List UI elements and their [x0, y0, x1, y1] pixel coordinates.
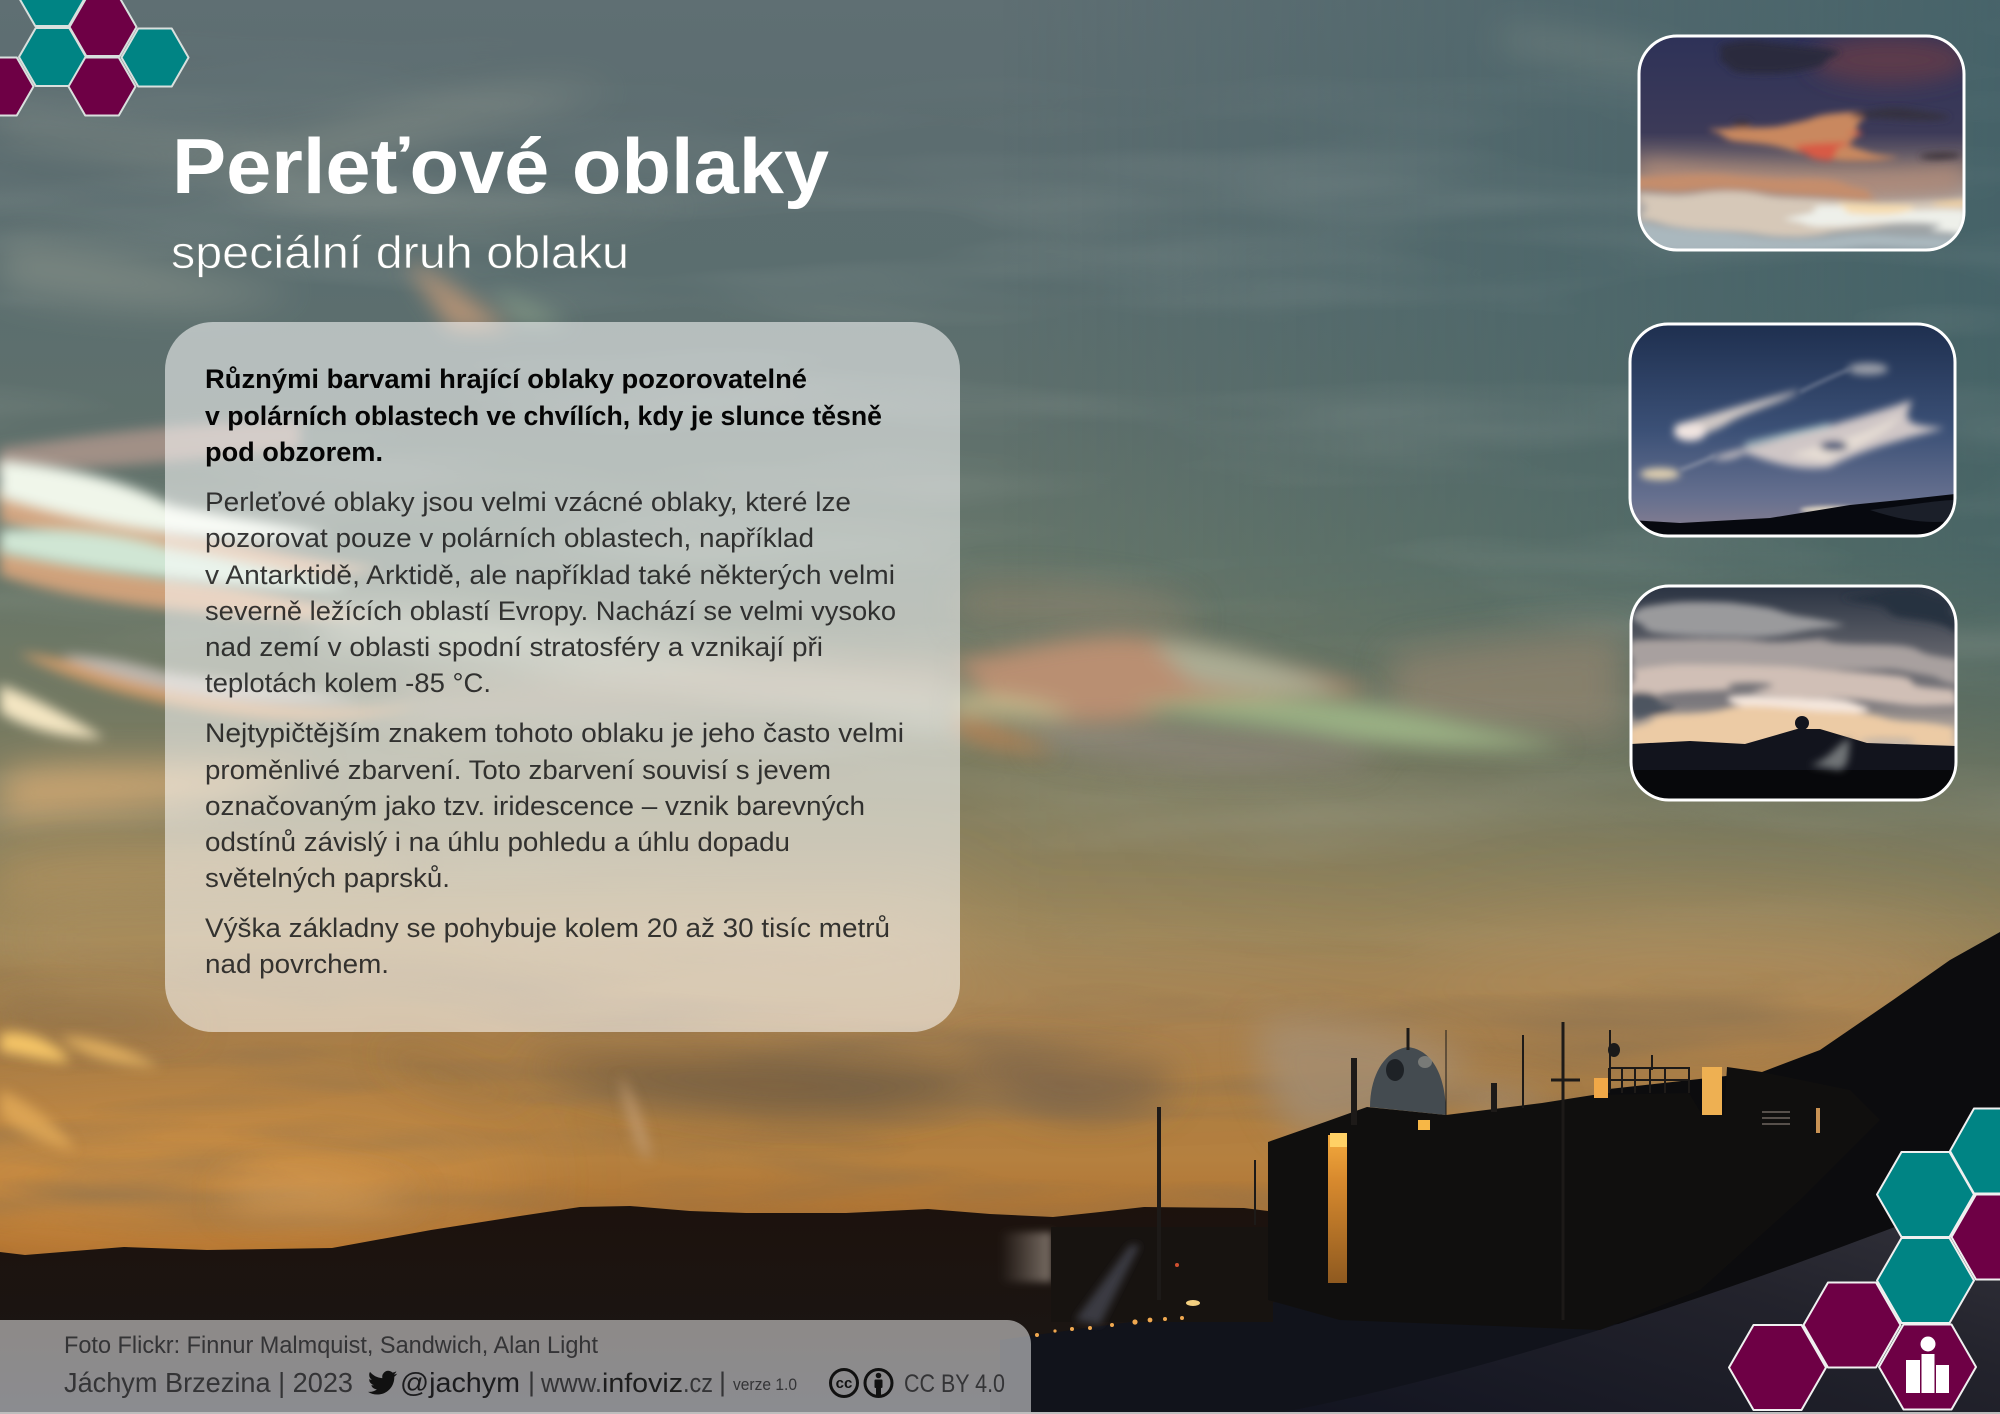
hexagon teal: [18, 0, 86, 26]
paragraph: colouring: Nejtypičtějším znakem tohoto oblaku je jeho často velmi: [205, 718, 904, 748]
hexagon magenta: [68, 58, 136, 116]
dusk cloud texture: [0, 993, 1836, 1233]
lead paragraph: Různými barvami hrající oblaky pozorovatelné: [205, 364, 807, 394]
warm dusk clouds: [0, 900, 1980, 1250]
paragraph: colouring: označovaným jako tzv. iridescence – vznik barevných: [205, 791, 865, 821]
right hill silhouette: [1600, 932, 2000, 1414]
lead paragraph: [205, 364, 882, 467]
paragraph: colouring: světelných paprsků.: [205, 863, 450, 893]
paragraph: occurrence: severně ležících oblastí Evropy. Nachází se velmi vysoko: [205, 596, 896, 626]
hexagon teal: [1877, 1152, 1974, 1237]
icon: creative commons: [830, 1370, 858, 1396]
station steam: [1257, 1017, 1560, 1140]
mountain ridge silhouette: [0, 1206, 1300, 1414]
lit walls: [1328, 1135, 1347, 1283]
paragraph: occurrence: v Antarktidě, Arktidě, ale například také některých velmi: [205, 560, 895, 590]
paragraph: occurrence: [205, 487, 896, 698]
panel background: [165, 322, 960, 1032]
snow slope: [1274, 1190, 2000, 1414]
lower ground: [1000, 1200, 2000, 1414]
website: [528, 1367, 726, 1398]
footer background: [0, 1320, 1031, 1412]
paragraph: height: nad povrchem.: [205, 949, 389, 979]
iridescent cloud left edge: [0, 420, 380, 619]
twitter handle: @jachym: [400, 1367, 520, 1398]
hexagon magenta with logo: [1879, 1324, 1976, 1410]
main station building: [1159, 1022, 1880, 1330]
fog by lower-left building: [1000, 1232, 1052, 1282]
rainbow wisp above the panel: [405, 262, 570, 330]
base edge: [0, 1412, 2000, 1414]
frame: [1639, 36, 1964, 250]
panel: description: [165, 322, 960, 1032]
frame: [1630, 324, 1955, 536]
photo: nacreous clouds over dome: [1631, 586, 1956, 800]
website: .cz: [683, 1368, 713, 1398]
lead paragraph: v polárních oblastech ve chvílích, kdy je slunce těsně: [205, 401, 882, 431]
hexagon magenta left: [1729, 1325, 1826, 1410]
hexagon magenta: [1804, 1282, 1900, 1368]
website: www.: [540, 1368, 602, 1398]
paragraph: occurrence: teplotách kolem -85 °C.: [205, 668, 491, 698]
icon: attribution: [865, 1370, 892, 1396]
hexagon magenta: [70, 0, 136, 56]
hexagon magenta: [1952, 1194, 2000, 1280]
photo: colourful cloud bands: [1639, 36, 1970, 250]
paragraph: occurrence: nad zemí v oblasti spodní stratosféry a vznikají při: [205, 632, 823, 662]
website: |: [528, 1367, 535, 1397]
louvre: [1762, 1112, 1790, 1124]
hexagon cluster top left: [0, 0, 188, 116]
dish: [1608, 1043, 1620, 1057]
lead paragraph: pod obzorem.: [205, 437, 383, 467]
hexagon cluster bottom right: [1729, 1108, 2000, 1410]
masts and antennas: [1159, 1022, 1689, 1320]
icon: twitter bird: [368, 1371, 397, 1395]
paragraph: colouring: odstínů závislý i na úhlu pohledu a úhlu dopadu: [205, 827, 790, 857]
iridescent band behind panel: [0, 607, 960, 900]
paragraph: occurrence: Perleťové oblaky jsou velmi vzácné oblaky, které lze: [205, 487, 851, 517]
photo: iridescent clouds over dark ridge: [1630, 324, 1955, 536]
hexagon teal: [122, 28, 188, 86]
photo credit: Foto Flickr: Finnur Malmquist, Sandwich, Alan Light: [64, 1332, 598, 1359]
website: |: [719, 1367, 726, 1397]
building body: [1268, 1067, 1880, 1330]
lower-left building: [1051, 1227, 1273, 1325]
central iridescent cloud: [960, 583, 1625, 765]
paragraph: occurrence: pozorovat pouze v polárních oblastech, například: [205, 523, 814, 553]
footer panel: [0, 1320, 1031, 1412]
author and year: Jáchym Brzezina | 2023: [64, 1367, 353, 1398]
streaky sky texture: [0, 154, 2000, 838]
paragraph: height: [205, 913, 890, 979]
icon: infoviz person chart: [1906, 1336, 1949, 1393]
subtitle: speciální druh oblaku: [171, 227, 629, 278]
paragraph: colouring: [205, 718, 904, 893]
hexagon teal: [1950, 1108, 2000, 1194]
paragraph: height: Výška základny se pohybuje kolem 20 až 30 tisíc metrů: [205, 913, 890, 943]
title: Perleťové oblaky: [172, 122, 829, 210]
icon: creative commons: cc: [836, 1375, 852, 1392]
frame: [1631, 586, 1956, 800]
website: infoviz: [602, 1368, 683, 1398]
hexagon teal: [19, 28, 86, 86]
hexagon teal: [1877, 1238, 1974, 1323]
licence: CC BY 4.0: [904, 1370, 1005, 1398]
paragraph: colouring: proměnlivé zbarvení. Toto zbarvení souvisí s jevem: [205, 755, 831, 785]
dome: [1370, 1047, 1446, 1115]
soft high wisps: [0, 30, 1680, 309]
road lights: [1035, 1263, 1200, 1337]
hexagon magenta: [0, 58, 34, 116]
version: verze 1.0: [733, 1375, 797, 1394]
